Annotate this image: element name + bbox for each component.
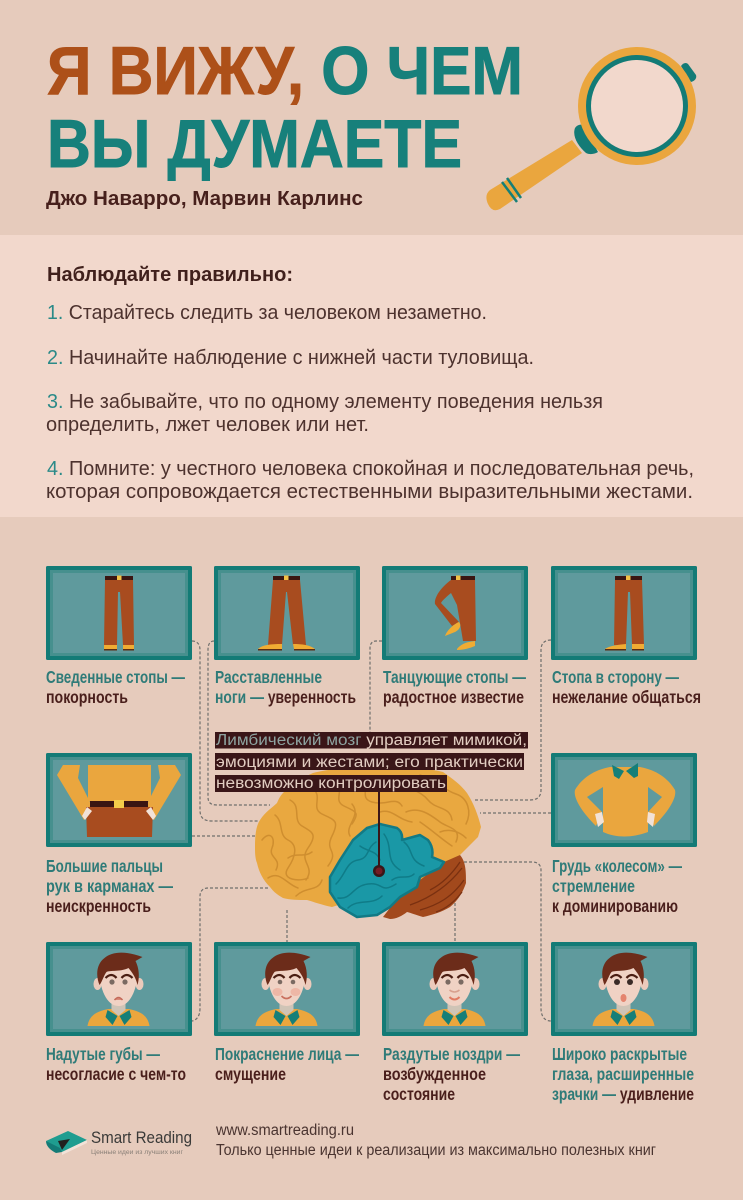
caption: pursed lips: несогласие с чем-то — [46, 1064, 186, 1084]
caption: pursed lips: Надутые губы — — [46, 1044, 160, 1064]
cerebellum: brown — [383, 855, 466, 919]
icon: trousers, feet together — [104, 576, 134, 650]
caption: blushing — [215, 1044, 359, 1084]
panel: observation tips — [0, 235, 743, 517]
footer text — [215, 1122, 656, 1159]
connector lines — [192, 640, 551, 1021]
authors: Джо Наварро, Марвин Карлинс — [46, 187, 363, 210]
tip 4: 4. Помните: у честного человека спокойная и последовательная речь, — [47, 457, 694, 480]
caption: blushing: Покраснение лица — — [215, 1044, 359, 1064]
caption: thumbs in pockets: Большие пальцы — [46, 856, 163, 876]
tip 4: которая сопровождается естественными выразительными жестами. — [46, 480, 693, 503]
panel: legs apart — [214, 566, 360, 660]
panel: thumbs in pockets — [46, 753, 192, 847]
icon: face, wide open eyes — [592, 953, 654, 1026]
panel: puffed chest — [551, 753, 697, 847]
title: ВЫ ДУМАЕТЕ — [47, 106, 462, 182]
panel: blushing — [214, 942, 360, 1036]
icon: face, flared nostrils — [424, 953, 486, 1026]
caption: blushing: смущение — [215, 1064, 286, 1084]
icon: trousers, legs apart — [258, 576, 315, 650]
caption: dancing feet: Танцующие стопы — — [383, 667, 526, 687]
footer text: Только ценные идеи к реализации из максимально полезных книг — [216, 1142, 656, 1159]
caption: legs apart: ноги — уверенность — [215, 687, 356, 707]
caption: dancing feet — [383, 667, 526, 707]
logo: Smart Reading: Smart Reading — [91, 1128, 192, 1147]
brain — [255, 767, 481, 919]
tip 3: 3. Не забывайте, что по одному элементу поведения нельзя — [47, 390, 603, 413]
caption: puffed chest: Грудь «колесом» — — [552, 856, 682, 876]
title — [47, 33, 523, 182]
heading: observe correctly: Наблюдайте правильно: — [47, 263, 293, 286]
caption: puffed chest: к доминированию — [552, 896, 678, 916]
caption: feet together — [46, 667, 185, 707]
icon: torso with thumbs in pockets — [57, 765, 181, 837]
frontal lobe: gold — [255, 767, 481, 907]
panel: feet together — [46, 566, 192, 660]
caption: flared nostrils: возбужденное — [383, 1064, 486, 1084]
footer text: www.smartreading.ru — [215, 1122, 354, 1139]
caption: legs apart: Расставленные — [215, 667, 322, 687]
caption: wide open eyes: зрачки — удивление — [552, 1084, 694, 1104]
tip 3: определить, лжет человек или нет. — [46, 413, 369, 436]
icon: magnifying glass — [486, 47, 696, 210]
caption: thumbs in pockets — [46, 856, 173, 916]
caption: dancing feet: радостное известие — [383, 687, 524, 707]
icon: face, pursed lips — [88, 953, 150, 1026]
tip 1: 1. Старайтесь следить за человеком незаметно. — [47, 301, 487, 324]
callout: limbic brain: невозможно контролировать — [216, 775, 446, 792]
caption: pursed lips — [46, 1044, 186, 1084]
icon: sweater with hands on hips — [575, 763, 675, 836]
icon: trousers, dancing — [435, 576, 476, 650]
icon: book — [46, 1131, 87, 1155]
panel: dancing feet — [382, 566, 528, 660]
caption: flared nostrils: Раздутые ноздри — — [383, 1044, 520, 1064]
caption: puffed chest: стремление — [552, 876, 635, 896]
caption: thumbs in pockets: неискренность — [46, 896, 151, 916]
caption: wide open eyes — [552, 1044, 694, 1104]
tip 4 — [46, 457, 694, 503]
caption: puffed chest — [552, 856, 682, 916]
caption: foot to the side: нежелание общаться — [552, 687, 701, 707]
caption: thumbs in pockets: рук в карманах — — [46, 876, 173, 896]
panel: wide open eyes — [551, 942, 697, 1036]
callout: limbic brain — [215, 732, 528, 792]
title: Я ВИЖУ, О ЧЕМ — [47, 33, 523, 109]
caption: wide open eyes: Широко раскрытые — [552, 1044, 687, 1064]
caption: flared nostrils: состояние — [383, 1084, 455, 1104]
caption: feet together: покорность — [46, 687, 128, 707]
callout: limbic brain: эмоциями и жестами; его практически — [216, 754, 523, 771]
caption: wide open eyes: глаза, расширенные — [552, 1064, 694, 1084]
icon: trousers, foot sideways — [605, 576, 644, 650]
caption: legs apart — [215, 667, 356, 707]
tip 3 — [46, 390, 603, 436]
caption: foot to the side — [552, 667, 701, 707]
caption: foot to the side: Стопа в сторону — — [552, 667, 679, 687]
panel: foot to the side — [551, 566, 697, 660]
tip 2: 2. Начинайте наблюдение с нижней части туловища. — [47, 346, 534, 369]
panel: flared nostrils — [382, 942, 528, 1036]
pointer: callout to brain — [373, 792, 385, 877]
caption: flared nostrils — [383, 1044, 520, 1104]
panel: pursed lips — [46, 942, 192, 1036]
logo: Smart Reading: Ценные идеи из лучших книг — [91, 1149, 184, 1156]
logo: Smart Reading — [46, 1128, 192, 1156]
limbic area: teal — [330, 824, 444, 917]
caption: feet together: Сведенные стопы — — [46, 667, 185, 687]
callout: limbic brain: Лимбический мозг управляет мимикой, — [216, 732, 527, 749]
icon: face, blushing — [256, 953, 318, 1026]
